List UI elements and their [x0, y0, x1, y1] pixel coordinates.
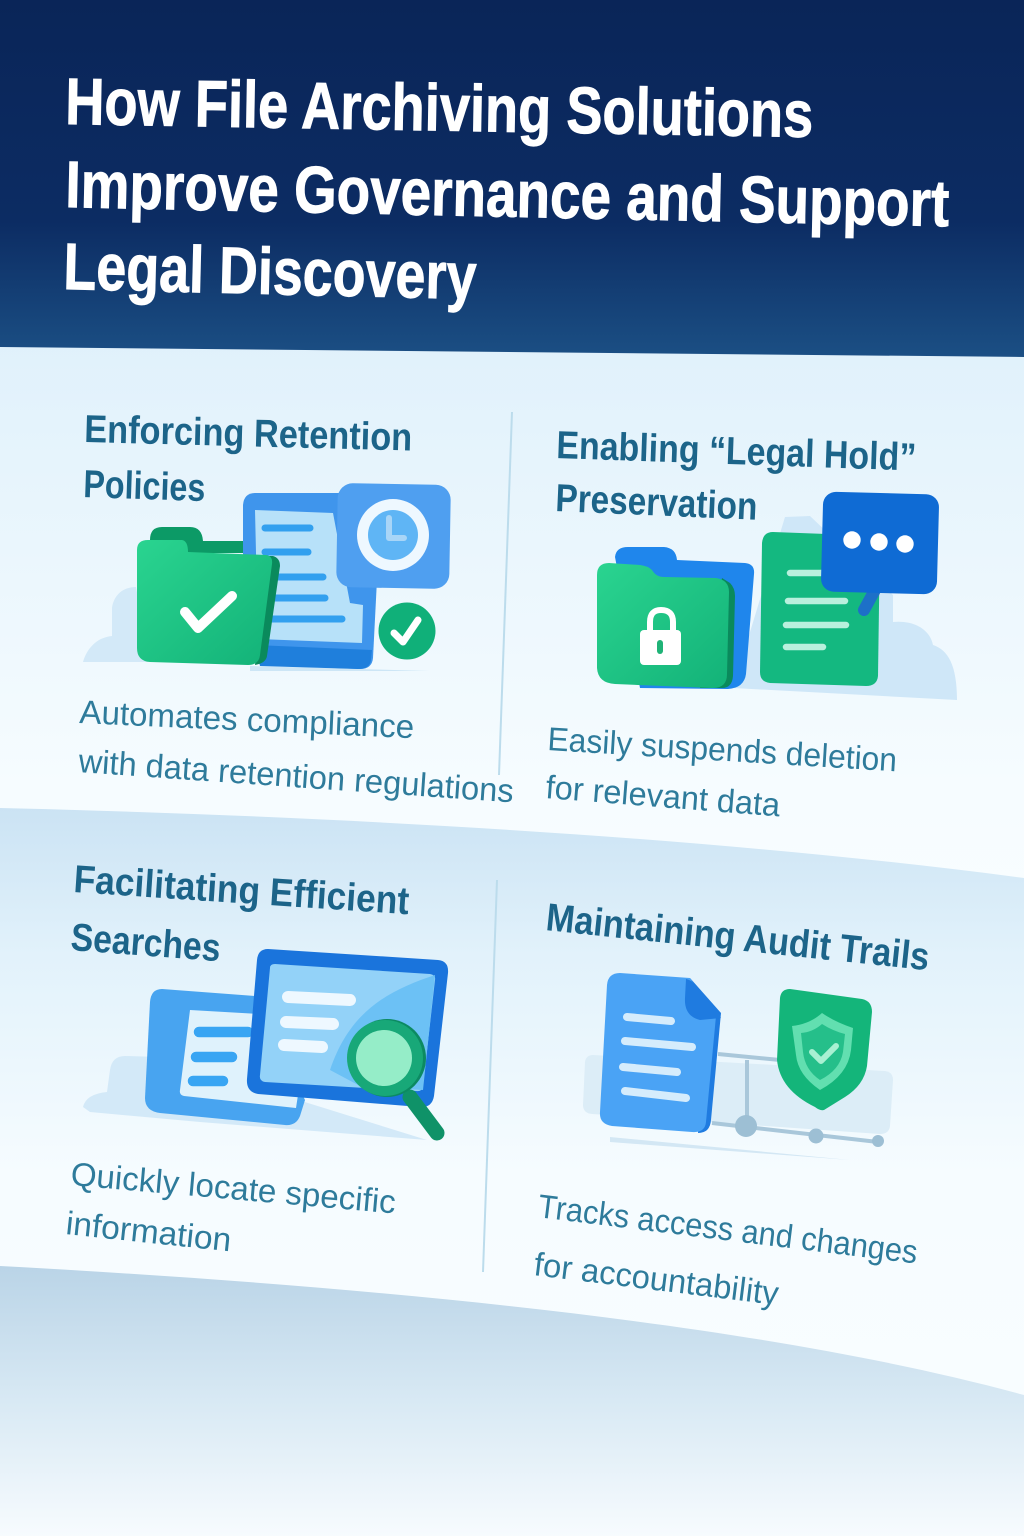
title: Legal Discovery — [63, 229, 478, 313]
heading: maintaining audit trails: Maintaining Audit Trails — [544, 896, 931, 979]
icon: document, shield and timeline — [583, 973, 893, 1160]
text: tracks access — [532, 1187, 920, 1312]
text: easily suspends deletion: Easily suspends deletion — [547, 720, 898, 778]
heading: facilitating efficient — [69, 858, 411, 970]
panel: enabling legal hold preservation — [544, 424, 957, 823]
heading: enforcing retention: Policies — [83, 463, 206, 510]
title — [63, 64, 950, 313]
bottom band — [0, 1266, 1024, 1536]
lower panel band — [0, 808, 1024, 1400]
title: How File Archiving Solutions — [65, 64, 814, 151]
text: easily suspends deletion: for relevant data — [544, 768, 782, 823]
text: automates compliance — [77, 693, 515, 809]
text: automates compliance: Automates compliance — [79, 693, 415, 745]
heading: enabling legal hold — [555, 424, 917, 529]
text: quickly locate: information — [64, 1204, 233, 1258]
heading: enforcing retention — [83, 408, 413, 510]
heading: enabling legal hold: Preservation — [555, 477, 758, 529]
icon: folder with document and clock — [83, 483, 451, 671]
vertical divider: top — [499, 412, 512, 775]
vertical divider: bottom — [483, 880, 497, 1272]
text: automates compliance: with data retention regulations — [77, 742, 515, 809]
heading: facilitating efficient: Searches — [69, 916, 222, 970]
panel: maintaining audit trails — [532, 896, 931, 1312]
header banner — [0, 0, 1024, 357]
icon: screens with magnifying glass — [83, 949, 448, 1140]
heading: facilitating efficient: Facilitating Efficient — [72, 858, 411, 923]
heading: enabling legal hold: Enabling “Legal Hold” — [556, 424, 917, 480]
panel: facilitating efficient searches — [64, 858, 448, 1258]
text: quickly locate — [64, 1155, 397, 1258]
panel: enforcing retention policies — [77, 408, 515, 809]
page background panel — [0, 340, 1024, 900]
heading: enforcing retention: Enforcing Retention — [84, 408, 413, 460]
icon: locked folder, document and chat bubble — [597, 491, 957, 700]
text: tracks access: Tracks access and changes — [536, 1187, 920, 1271]
text: tracks access: for accountability — [532, 1245, 781, 1312]
text: quickly locate: Quickly locate specific — [69, 1155, 397, 1220]
text: easily suspends deletion — [544, 720, 898, 823]
